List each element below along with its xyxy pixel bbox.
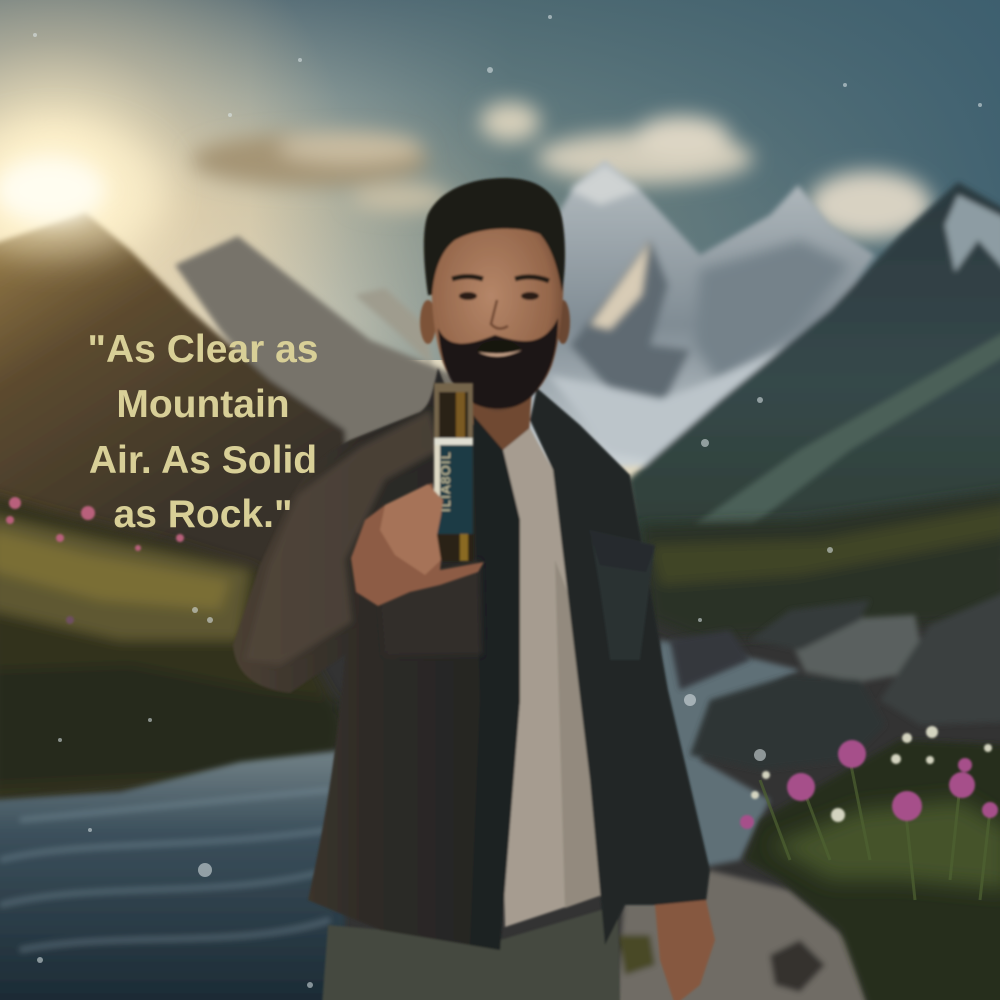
hand and bottle: ILIA8OIL xyxy=(438,452,453,512)
clouds xyxy=(192,102,932,239)
right dark mountain xyxy=(628,182,1000,560)
jacket right xyxy=(530,388,710,945)
hair xyxy=(424,178,565,295)
fingers xyxy=(380,484,443,575)
jacket placket xyxy=(470,415,520,950)
headline: Air. As Solid xyxy=(89,439,317,482)
flower bush right xyxy=(740,726,1000,1000)
man xyxy=(233,178,715,1000)
mountains xyxy=(0,160,1000,640)
headline: as Rock." xyxy=(114,493,292,536)
sky xyxy=(0,0,1000,560)
snow mountain xyxy=(520,160,875,470)
left dark mountain xyxy=(0,212,360,640)
headline: Mountain xyxy=(116,383,290,426)
eyes and brows xyxy=(452,276,549,281)
headline: "As Clear as xyxy=(88,328,318,371)
ears xyxy=(420,300,436,344)
pink flowers left xyxy=(6,497,184,624)
right hand xyxy=(655,900,715,1000)
palm xyxy=(351,483,484,606)
bottle xyxy=(434,383,473,561)
headline xyxy=(88,328,318,536)
mouth xyxy=(476,340,522,355)
head xyxy=(432,225,563,412)
trousers xyxy=(322,905,620,1000)
hand and bottle xyxy=(351,383,484,606)
river xyxy=(0,640,800,1000)
jacket left sleeve and body xyxy=(233,368,520,950)
beard xyxy=(438,318,558,409)
meadow xyxy=(0,490,1000,805)
sun glow xyxy=(0,125,165,255)
neck xyxy=(455,340,535,470)
t-shirt xyxy=(500,428,602,927)
rocks xyxy=(615,590,1000,1000)
mid mountains xyxy=(175,236,480,480)
